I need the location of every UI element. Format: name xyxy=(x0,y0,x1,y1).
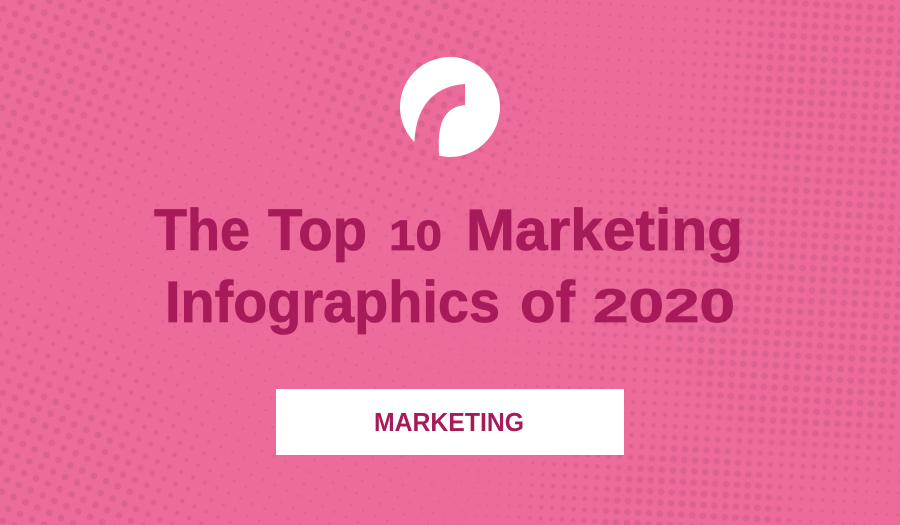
category button xyxy=(276,389,624,455)
title: 10 xyxy=(389,212,442,260)
icon: circular logo xyxy=(400,57,500,157)
title: The xyxy=(154,198,250,263)
title: Top xyxy=(268,198,367,263)
title: 2020 xyxy=(593,279,735,332)
title xyxy=(154,198,743,335)
title: Infographics xyxy=(165,270,500,335)
title: Marketing xyxy=(466,198,743,263)
category button: MARKETING xyxy=(374,407,524,437)
title: of xyxy=(520,270,576,335)
